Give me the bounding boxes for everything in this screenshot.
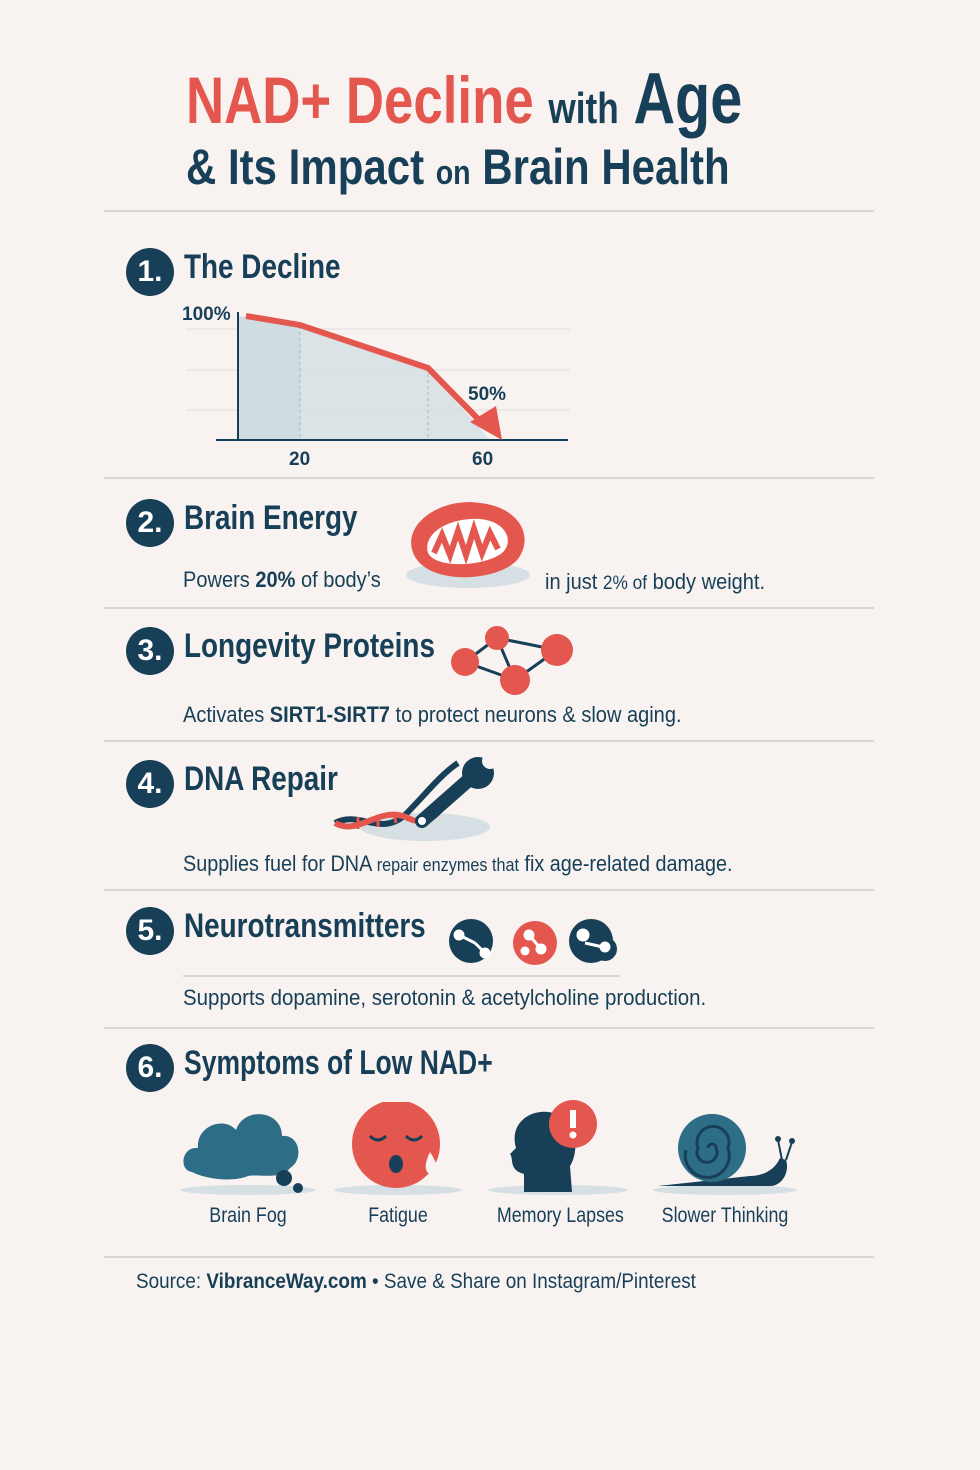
symptom: memory lapses <box>488 1100 628 1227</box>
number 1 <box>126 248 174 296</box>
symptom: slower thinking <box>653 1114 797 1227</box>
number 2 <box>126 499 174 547</box>
text: Activates SIRT1-SIRT7 to protect neurons & slow aging. <box>183 702 682 727</box>
text right: in just 2% of body weight. <box>545 569 765 594</box>
section 3: longevity proteins <box>126 626 682 727</box>
section 6: symptoms <box>126 1044 797 1227</box>
number 4: 4. <box>137 767 163 800</box>
line chart: 50% <box>468 384 506 405</box>
heading: Brain Energy <box>184 499 358 537</box>
footer source: Source: VibranceWay.com • Save & Share on Instagram/Pinterest <box>136 1270 696 1293</box>
symptom: brain fog: Brain Fog <box>209 1204 287 1227</box>
symptom: fatigue: Fatigue <box>368 1204 428 1227</box>
symptom: memory lapses: Memory Lapses <box>497 1204 624 1227</box>
icon: molecule <box>451 626 573 695</box>
number 4 <box>126 760 174 808</box>
symptom: slower thinking: Slower Thinking <box>662 1204 788 1227</box>
number 6 <box>126 1044 174 1092</box>
text: Supplies fuel for DNA repair enzymes that fix age-related damage. <box>183 851 733 876</box>
heading: Symptoms of Low NAD+ <box>184 1044 493 1082</box>
text left: Powers 20% of body’s <box>183 567 381 592</box>
number 1: 1. <box>137 255 163 288</box>
section 5: neurotransmitters <box>126 907 706 1010</box>
line chart: 100% <box>182 304 231 325</box>
number 3 <box>126 627 174 675</box>
title <box>186 59 742 195</box>
heading: Longevity Proteins <box>184 627 435 665</box>
icon: DNA and wrench <box>334 757 494 841</box>
heading: Neurotransmitters <box>184 907 426 945</box>
number 3: 3. <box>137 634 163 667</box>
heading: The Decline <box>184 248 340 286</box>
line chart <box>182 304 570 470</box>
symptom: fatigue <box>334 1102 462 1227</box>
section 2: brain energy <box>126 499 765 594</box>
number 5 <box>126 907 174 955</box>
icon: mitochondrion <box>406 502 530 588</box>
symptom: brain fog <box>180 1114 316 1227</box>
title: & Its Impact on Brain Health <box>186 139 730 195</box>
number 6: 6. <box>137 1051 163 1084</box>
icons: neurotransmitters <box>449 919 617 965</box>
line chart: 60 <box>472 449 493 470</box>
number 2: 2. <box>137 506 163 539</box>
title: NAD+ Decline with Age <box>186 59 742 139</box>
heading: DNA Repair <box>184 760 338 798</box>
section 4: DNA repair <box>126 757 733 876</box>
number 5: 5. <box>137 914 163 947</box>
line chart: 20 <box>289 449 310 470</box>
section 1: decline <box>126 248 570 470</box>
text: Supports dopamine, serotonin & acetylcholine production. <box>183 985 706 1010</box>
